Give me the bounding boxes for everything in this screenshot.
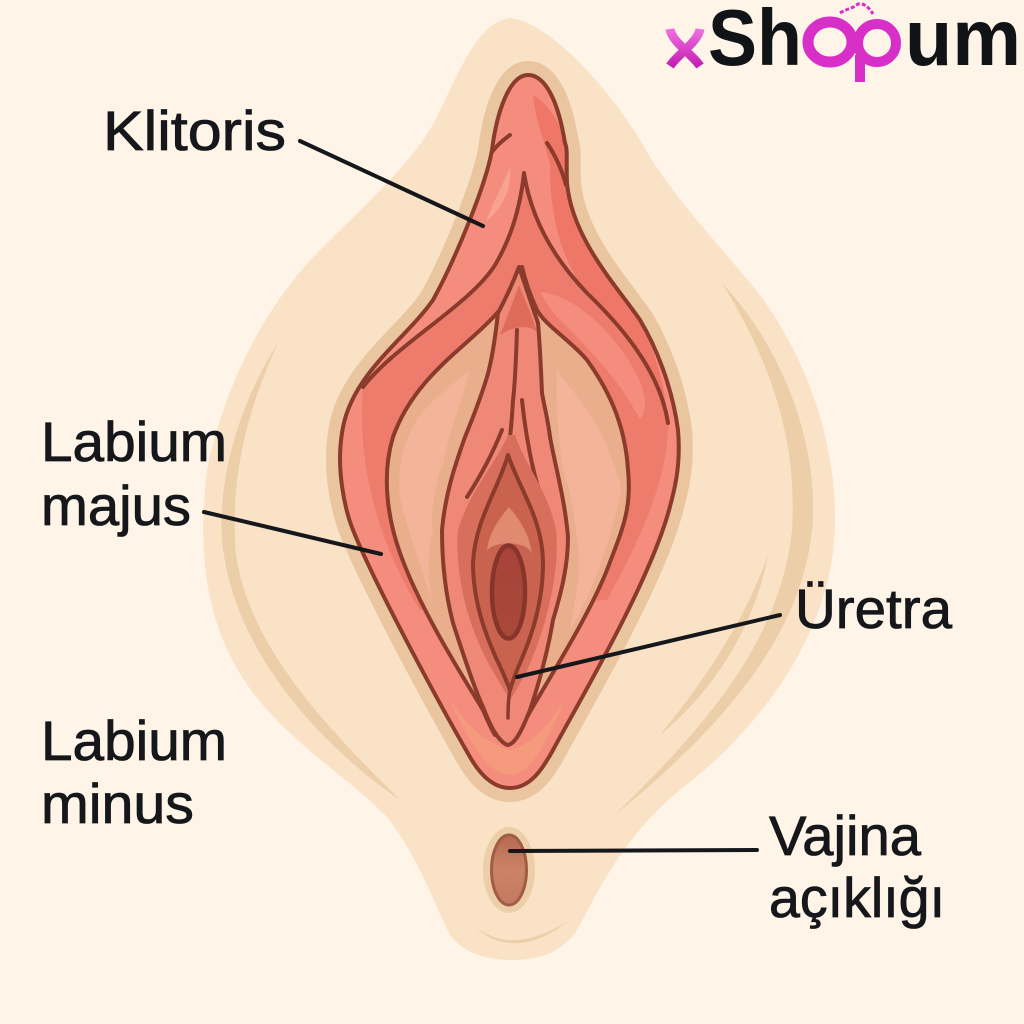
label: Labium majus: majus: [41, 474, 191, 537]
highlight on left fold: [486, 168, 510, 222]
leader line: Vajina açıklığı: [510, 850, 757, 851]
inner fold: [457, 435, 557, 700]
pale highlight left: [399, 370, 470, 607]
logo x: [670, 29, 700, 66]
top shading: [533, 95, 668, 423]
logo first ring: [808, 22, 852, 62]
dark band between folds: [362, 173, 668, 610]
second curve line pair: [363, 173, 668, 423]
shadow around the central form: [340, 75, 679, 788]
outer fold outline: [340, 75, 679, 788]
logo second ring: [858, 24, 896, 62]
central fold shading: [500, 285, 537, 335]
label: Labium minus: minus: [41, 772, 194, 835]
outer skin shape: [203, 18, 835, 960]
skin fold right lower: [660, 555, 768, 735]
skin fold right: [615, 283, 813, 815]
skin fold left: [221, 343, 400, 800]
leader line: Klitoris: [300, 141, 483, 226]
central oval: [492, 546, 525, 638]
label: Vajina açıklığı: açıklığı: [769, 866, 945, 929]
bottom band: [450, 700, 565, 775]
bottom crease: [477, 922, 566, 943]
logo: xShopum: [670, 0, 1021, 82]
outer fold: [340, 75, 679, 788]
inner almond: [473, 455, 543, 690]
hood fold lines: [492, 135, 566, 185]
leader line: Labium majus: [204, 512, 381, 554]
label: Labium minus: Labium: [41, 709, 227, 772]
inner pink: [487, 507, 532, 555]
central vertical lines: [467, 330, 540, 497]
lower opening: [483, 827, 535, 913]
label: Labium majus: [41, 410, 227, 537]
pale inner surface: [387, 267, 629, 735]
label: Üretra: Üretra: [795, 577, 953, 640]
leader line: Üretra: [517, 615, 780, 677]
label: Vajina açıklığı: [769, 804, 945, 929]
lower tip line: [508, 690, 510, 718]
label: Labium minus: [41, 709, 227, 835]
pale highlight right: [556, 370, 621, 630]
logo stem: [855, 55, 865, 82]
anatomical illustration: [203, 18, 835, 960]
label: Vajina açıklığı: Vajina: [769, 804, 922, 867]
labium band highlight: [540, 292, 645, 420]
logo chain: [840, 4, 873, 14]
label: Klitoris: Klitoris: [103, 99, 286, 162]
central fold: [442, 267, 568, 745]
label: Labium majus: Labium: [41, 410, 227, 473]
